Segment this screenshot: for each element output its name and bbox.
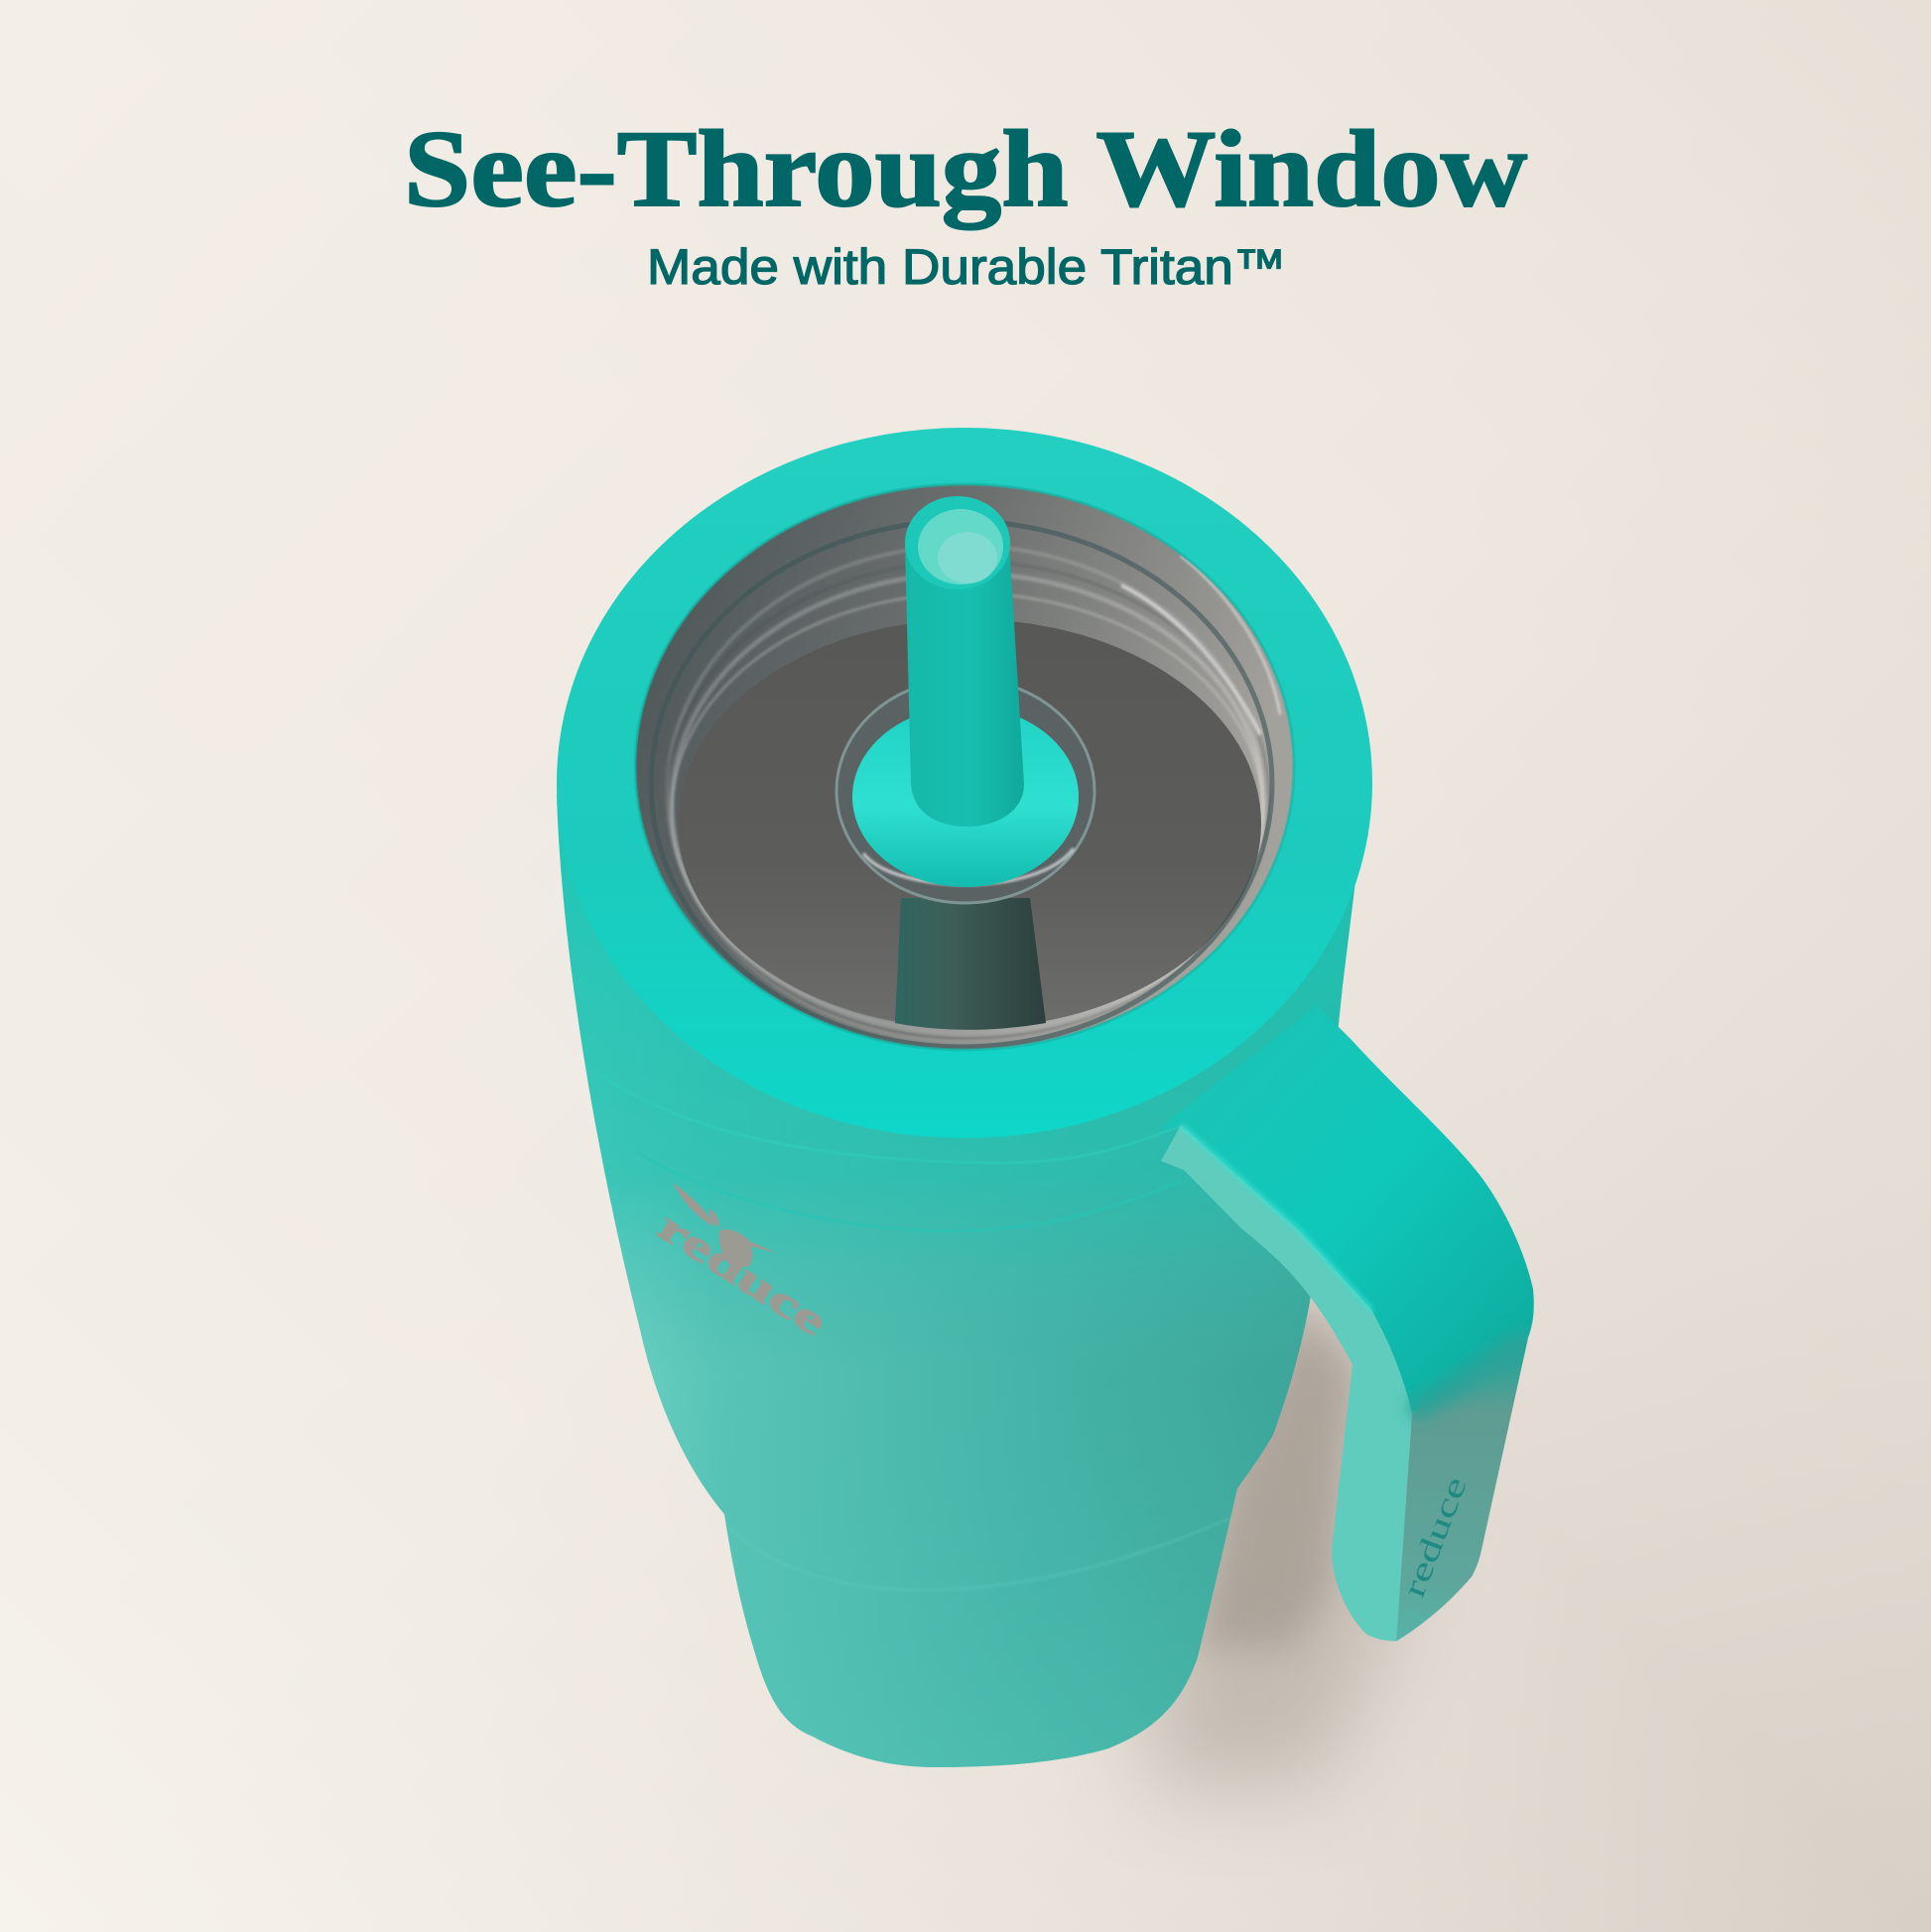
lid ring bbox=[651, 521, 1272, 1047]
straw body bbox=[905, 544, 1024, 827]
rim bbox=[557, 428, 1372, 1138]
handle top face bbox=[1159, 1005, 1534, 1413]
tumbler bbox=[557, 428, 1534, 1767]
subtitle: Made with Durable Tritan™ bbox=[647, 239, 1286, 295]
cast shadow bbox=[1141, 1270, 1409, 1786]
glass ridges bbox=[666, 546, 1280, 1042]
glass collar bbox=[837, 679, 1094, 903]
handle corner shading bbox=[1412, 1338, 1528, 1413]
handle end face bbox=[1396, 1338, 1528, 1641]
brand logo on body: reduce bbox=[650, 1204, 835, 1346]
handle bbox=[1159, 1005, 1534, 1641]
straw reflection bbox=[895, 898, 1046, 1030]
tumbler body bbox=[557, 784, 1367, 1767]
window floor bbox=[678, 619, 1261, 1028]
rim top edge accent bbox=[635, 484, 1294, 1050]
straw mouth bbox=[905, 496, 1010, 589]
handle logo: reduce bbox=[1395, 1472, 1474, 1603]
title: See-Through Window bbox=[404, 108, 1527, 229]
see-through window bbox=[635, 484, 1294, 1050]
handle inner face bbox=[1161, 1125, 1412, 1641]
brand logo on body bbox=[650, 1183, 835, 1346]
washer bbox=[852, 707, 1079, 887]
handle ridge highlight bbox=[1181, 1125, 1372, 1311]
